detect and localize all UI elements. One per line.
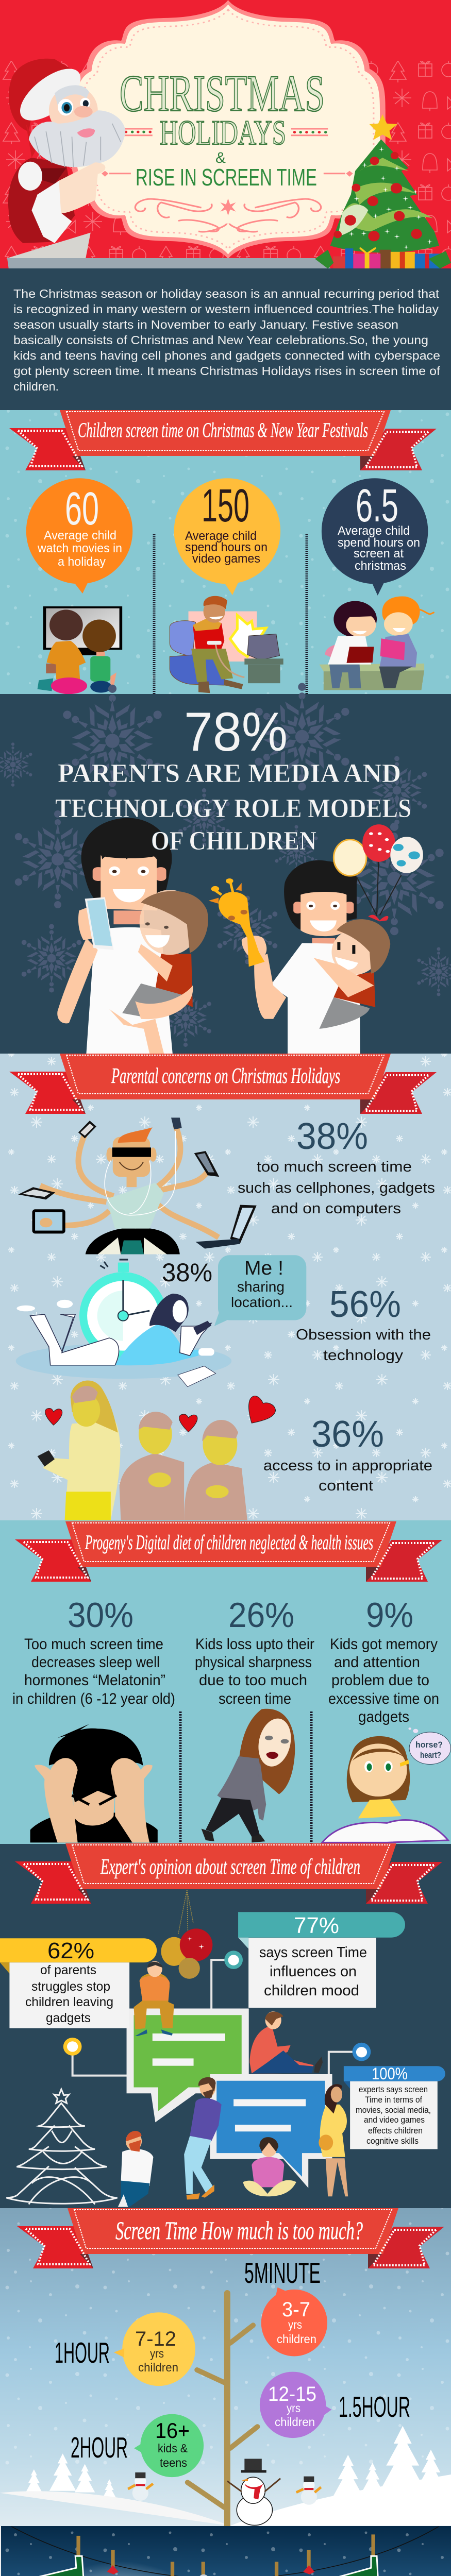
stat label: 38% sharing location bubble: sharing	[237, 1279, 285, 1295]
stat: 62% parents: gadgets	[46, 2011, 91, 2025]
stocking line with stockings	[11, 2527, 439, 2576]
icon: girls with tablets	[319, 597, 435, 690]
stat: 5 minutes for 3-7 years: children	[277, 2332, 316, 2346]
label: horse or heart thought: heart?	[420, 1750, 441, 1760]
panel: digital diet health issues	[0, 1520, 451, 1844]
panel: intro text: children.	[13, 380, 59, 393]
ribbon heading: parental concerns	[9, 1054, 437, 1114]
stat: 9% memory and attention	[328, 1596, 439, 1725]
panel: santa scene	[0, 2526, 451, 2576]
icon: group of people with phones	[118, 1961, 348, 2207]
stat: 1 hour for 7-12 years: 7-12	[135, 2328, 176, 2350]
stat: 30% melatonin: Too much screen time	[24, 1636, 163, 1653]
stat: 62% parents: children leaving	[25, 1995, 113, 2009]
title: CHRISTMAS	[120, 64, 325, 122]
stat label: 38% sharing location bubble: Me !	[244, 1258, 283, 1279]
heading: parents role models: OF CHILDREN	[151, 826, 316, 856]
stat: 5 minutes for 3-7 years: yrs	[288, 2318, 302, 2331]
stat: 60 movies: 60	[65, 483, 99, 535]
stat: 100% experts: effects children	[368, 2126, 423, 2136]
icon: girl with stopwatch	[16, 1259, 231, 1387]
stat: 2 hour for 16+: teens	[160, 2456, 187, 2469]
stat: 100% experts: Time in terms of	[365, 2095, 422, 2105]
stat: 38% too much screen time: 38%	[296, 1116, 368, 1157]
stat: 100% experts	[344, 2064, 445, 2149]
chart: age branch tree	[188, 2293, 257, 2526]
stat: 6.5 hours on screen	[322, 478, 428, 596]
icon: celtic knot christmas tree	[6, 2089, 118, 2205]
stat: 38% too much screen time	[238, 1116, 435, 1217]
icon: multi-armed man with devices	[18, 1117, 257, 1255]
stat label: 38% sharing location bubble: 38%	[162, 1258, 212, 1287]
stat: 150 video game hours: video games	[192, 552, 260, 566]
stat: 36% inappropriate content	[263, 1414, 432, 1494]
stat: 6.5 hours on screen: 6.5	[356, 480, 398, 532]
icon: thinking girl with book	[322, 1727, 450, 1842]
stat: 36% inappropriate content: access to in appropriate	[263, 1458, 432, 1474]
stat: 100% experts: 100%	[372, 2064, 408, 2083]
icon: parent with giraffe toy, crying baby and balloons	[209, 824, 423, 1054]
stat: 2 hour for 16+: 16+	[155, 2418, 190, 2443]
panel: expert opinion	[0, 1843, 451, 2208]
stat: 6.5 hours on screen: Average child	[338, 524, 410, 538]
panel: intro text: season usually starts in November to early January. Festive season	[13, 318, 398, 331]
stat: 56% obsession	[296, 1284, 431, 1364]
title	[120, 64, 325, 191]
stat: 1 hour for 7-12 years: 1HOUR	[55, 2336, 110, 2369]
stat: 77% mood: influences on	[270, 1963, 357, 1980]
stat: 9% memory and attention: and attention	[334, 1654, 420, 1671]
stat: 6.5 hours on screen: spend hours on	[338, 536, 420, 550]
heading: parents role models: PARENTS ARE MEDIA AND	[58, 759, 401, 788]
panel: parental concerns	[0, 1054, 451, 1520]
panel: header	[0, 0, 451, 268]
stat: 60 movies: Average child	[44, 529, 116, 543]
panel: intro text: basically consists of Christmas and New Year celebrations.So, the young	[13, 333, 428, 347]
stat: 1.5 hour for 12-15 years: yrs	[287, 2401, 300, 2415]
title: &	[215, 149, 226, 166]
heading: parents role models: TECHNOLOGY ROLE MODELS	[55, 794, 411, 823]
stat label: 38% sharing location bubble	[162, 1255, 306, 1326]
icon: santa	[8, 59, 125, 243]
stat: 56% obsession: Obsession with the	[296, 1327, 431, 1343]
stat: 56% obsession: technology	[323, 1347, 404, 1364]
panel: intro text: kids and teens having cell phones and gadgets connected with cyberspace	[13, 349, 440, 362]
ribbon heading: progeny digital diet	[15, 1521, 442, 1582]
panel: intro text: is recognized in many western or western influenced countries.The holiday	[13, 302, 439, 316]
moon glow	[0, 2561, 240, 2576]
stat: 62% parents	[0, 1938, 157, 2028]
stat: 2 hour for 16+: 2HOUR	[71, 2431, 128, 2464]
panel: 78 percent parents	[0, 683, 451, 1054]
icon: connector dots and christmas balls	[63, 1890, 371, 2061]
stat: 26% physical sharpness: Kids loss upto their	[195, 1636, 314, 1653]
decorative plaque	[71, 0, 386, 259]
stat: 2 hour for 16+	[71, 2414, 204, 2477]
big stat: 78%: 78%	[184, 701, 288, 762]
stat: 100% experts: movies, social media,	[356, 2105, 431, 2115]
title: HOLIDAYS	[160, 113, 286, 152]
label: horse or heart thought: horse?	[415, 1740, 443, 1750]
grey shelf	[7, 233, 331, 268]
stat label: 38% sharing location bubble: location...	[231, 1294, 293, 1310]
stat: 26% physical sharpness: physical sharpness	[195, 1654, 312, 1671]
stat: 77% mood: children mood	[264, 1982, 359, 1999]
stat: 60 movies	[26, 478, 132, 594]
stat: 5 minutes for 3-7 years	[244, 2257, 327, 2356]
stat: 9% memory and attention: problem due to	[331, 1672, 429, 1689]
icon: stressed man	[30, 1724, 158, 1842]
stat: 26% physical sharpness: 26%	[228, 1596, 294, 1635]
stat: 56% obsession: 56%	[329, 1284, 401, 1325]
stat: 5 minutes for 3-7 years: 5MINUTE	[244, 2257, 321, 2290]
icon: snowmen	[128, 2459, 321, 2526]
stat: 38% too much screen time: such as cellphones, gadgets	[238, 1180, 435, 1196]
heading: parents role models	[55, 759, 411, 856]
stat: 6.5 hours on screen: christmas	[355, 559, 406, 573]
stat: 1 hour for 7-12 years	[55, 2312, 195, 2386]
ribbon heading: how much is too much	[17, 2208, 444, 2268]
stat: 38% too much screen time: too much screen time	[257, 1159, 412, 1175]
panel: how much screen time	[0, 2208, 451, 2526]
stat: 150 video game hours: 150	[202, 480, 249, 532]
stat: 26% physical sharpness: due to too much	[199, 1672, 307, 1689]
stat: 36% inappropriate content: 36%	[311, 1414, 384, 1455]
connector lines	[73, 1960, 353, 2076]
stat: 30% melatonin	[12, 1596, 175, 1707]
stat: 26% physical sharpness: screen time	[219, 1690, 291, 1707]
stat: 150 video game hours: spend hours on	[185, 540, 268, 554]
stat: 9% memory and attention: Kids got memory	[330, 1636, 438, 1653]
icon: parent with phone and baby	[57, 818, 208, 1054]
panel: intro text	[0, 268, 451, 410]
stat: 38% too much screen time: and on computers	[271, 1200, 401, 1217]
ribbon heading: expert opinion	[15, 1843, 442, 1904]
stat: 77% mood: says screen Time	[259, 1944, 367, 1961]
stat: 60 movies: a holiday	[58, 555, 106, 569]
chat bubbles	[127, 2008, 332, 2188]
icon: christmas tree with gifts	[315, 114, 451, 268]
stat: 36% inappropriate content: content	[319, 1478, 373, 1494]
stat: 62% parents: 62%	[47, 1938, 94, 1963]
stat: 9% memory and attention: gadgets	[358, 1708, 409, 1725]
icon: tired girl	[202, 1709, 295, 1842]
stat: 77% mood: 77%	[294, 1913, 339, 1938]
stat: 30% melatonin: 30%	[68, 1596, 133, 1635]
stat: 30% melatonin: in children (6 -12 year old)	[12, 1690, 175, 1707]
stat: 62% parents: of parents	[40, 1963, 96, 1977]
stat: 100% experts: cognitive skills	[366, 2136, 419, 2146]
ribbon heading: children screen time	[9, 410, 437, 470]
stat: 9% memory and attention: 9%	[366, 1596, 413, 1635]
panel: intro text: The Christmas season or holiday season is an annual recurring period that	[13, 287, 440, 300]
stat: 1.5 hour for 12-15 years: children	[275, 2415, 315, 2429]
icon: teens on phones with hearts	[38, 1380, 276, 1520]
stat: 1 hour for 7-12 years: children	[138, 2361, 178, 2374]
stat: 30% melatonin: decreases sleep well	[31, 1654, 160, 1671]
icon: boy playing video game	[170, 596, 283, 693]
panel: intro text: got plenty screen time. It means Christmas Holidays rises in screen time of	[13, 364, 441, 378]
stat: 62% parents: struggles stop	[31, 1979, 110, 1994]
icon: kids watching tv	[38, 606, 122, 694]
panel: children screen time	[0, 410, 451, 694]
stat: 2 hour for 16+: kids &	[158, 2442, 188, 2455]
stat: 5 minutes for 3-7 years: 3-7	[282, 2298, 310, 2321]
snowy landscape	[0, 2426, 451, 2526]
stat: 1 hour for 7-12 years: yrs	[150, 2347, 164, 2360]
stat: 150 video game hours: Average child	[185, 529, 257, 543]
stat: 1.5 hour for 12-15 years: 12-15	[268, 2383, 316, 2405]
stat: 9% memory and attention: excessive time on	[328, 1690, 439, 1707]
stat: 100% experts: and video games	[364, 2115, 425, 2125]
stat: 6.5 hours on screen: screen at	[354, 547, 404, 561]
stat: 100% experts: experts says screen	[359, 2084, 428, 2094]
title: RISE IN SCREEN TIME	[136, 164, 317, 191]
stat: 1.5 hour for 12-15 years	[260, 2372, 410, 2438]
stat: 30% melatonin: hormones “Melatonin”	[24, 1672, 165, 1689]
stat: 77% mood	[238, 1912, 405, 2008]
stat: 60 movies: watch movies in	[37, 541, 122, 555]
stat: 150 video game hours	[174, 478, 280, 595]
stat: 26% physical sharpness	[195, 1596, 314, 1707]
